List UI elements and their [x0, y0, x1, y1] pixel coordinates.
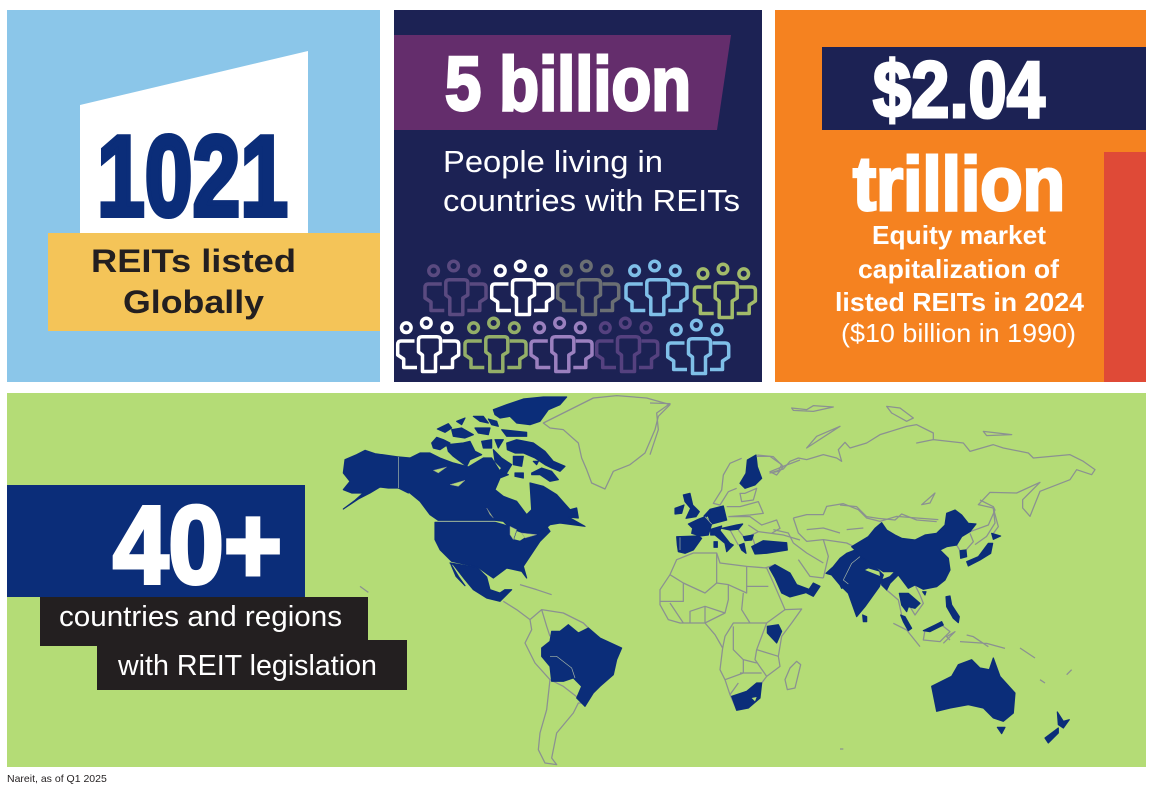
map: Europe — [675, 455, 800, 554]
description — [835, 220, 1085, 348]
description — [443, 144, 740, 218]
stat: 1021: 1021 — [97, 114, 288, 240]
icon: crowd of people — [398, 261, 755, 374]
yellow label — [48, 233, 380, 331]
panel: population — [394, 10, 762, 382]
purple banner — [394, 35, 731, 130]
stat: $2.04 trillion: $2.04 — [873, 45, 1045, 134]
navy banner — [822, 47, 1146, 130]
panel: world map — [7, 393, 1146, 767]
map: Americas — [343, 396, 670, 765]
white angled backing shape — [80, 51, 308, 233]
description: countries with REITs — [443, 183, 740, 218]
map: Canadian Arctic islands — [432, 397, 567, 481]
panel: market capitalization — [775, 10, 1146, 382]
map: East and South Asia — [826, 500, 1005, 648]
description: capitalization of — [858, 254, 1059, 284]
map: Eurasia, Africa, Oceania — [650, 403, 1095, 749]
description: Equity market — [872, 220, 1046, 250]
panel: REITs listed — [7, 10, 380, 382]
callout: 40+ countries — [7, 484, 407, 690]
source note: Nareit, as of Q1 2025 — [7, 773, 107, 785]
description: ($10 billion in 1990) — [841, 318, 1076, 348]
description: listed REITs in 2024 — [835, 287, 1085, 317]
stat: 40+: 40+ — [113, 484, 282, 607]
yellow label: REITs listed — [91, 243, 296, 279]
red accent bar — [1104, 152, 1146, 382]
yellow label: Globally — [123, 284, 264, 320]
stat: 5 billion: 5 billion — [445, 42, 691, 127]
black label: with REIT legislation — [117, 650, 377, 682]
black label: countries and regions — [59, 601, 342, 633]
description: People living in — [443, 144, 663, 179]
stat: $2.04 trillion: trillion — [853, 142, 1065, 227]
stat: $2.04 trillion — [853, 45, 1065, 227]
navy banner — [7, 485, 305, 597]
black label — [40, 597, 407, 690]
